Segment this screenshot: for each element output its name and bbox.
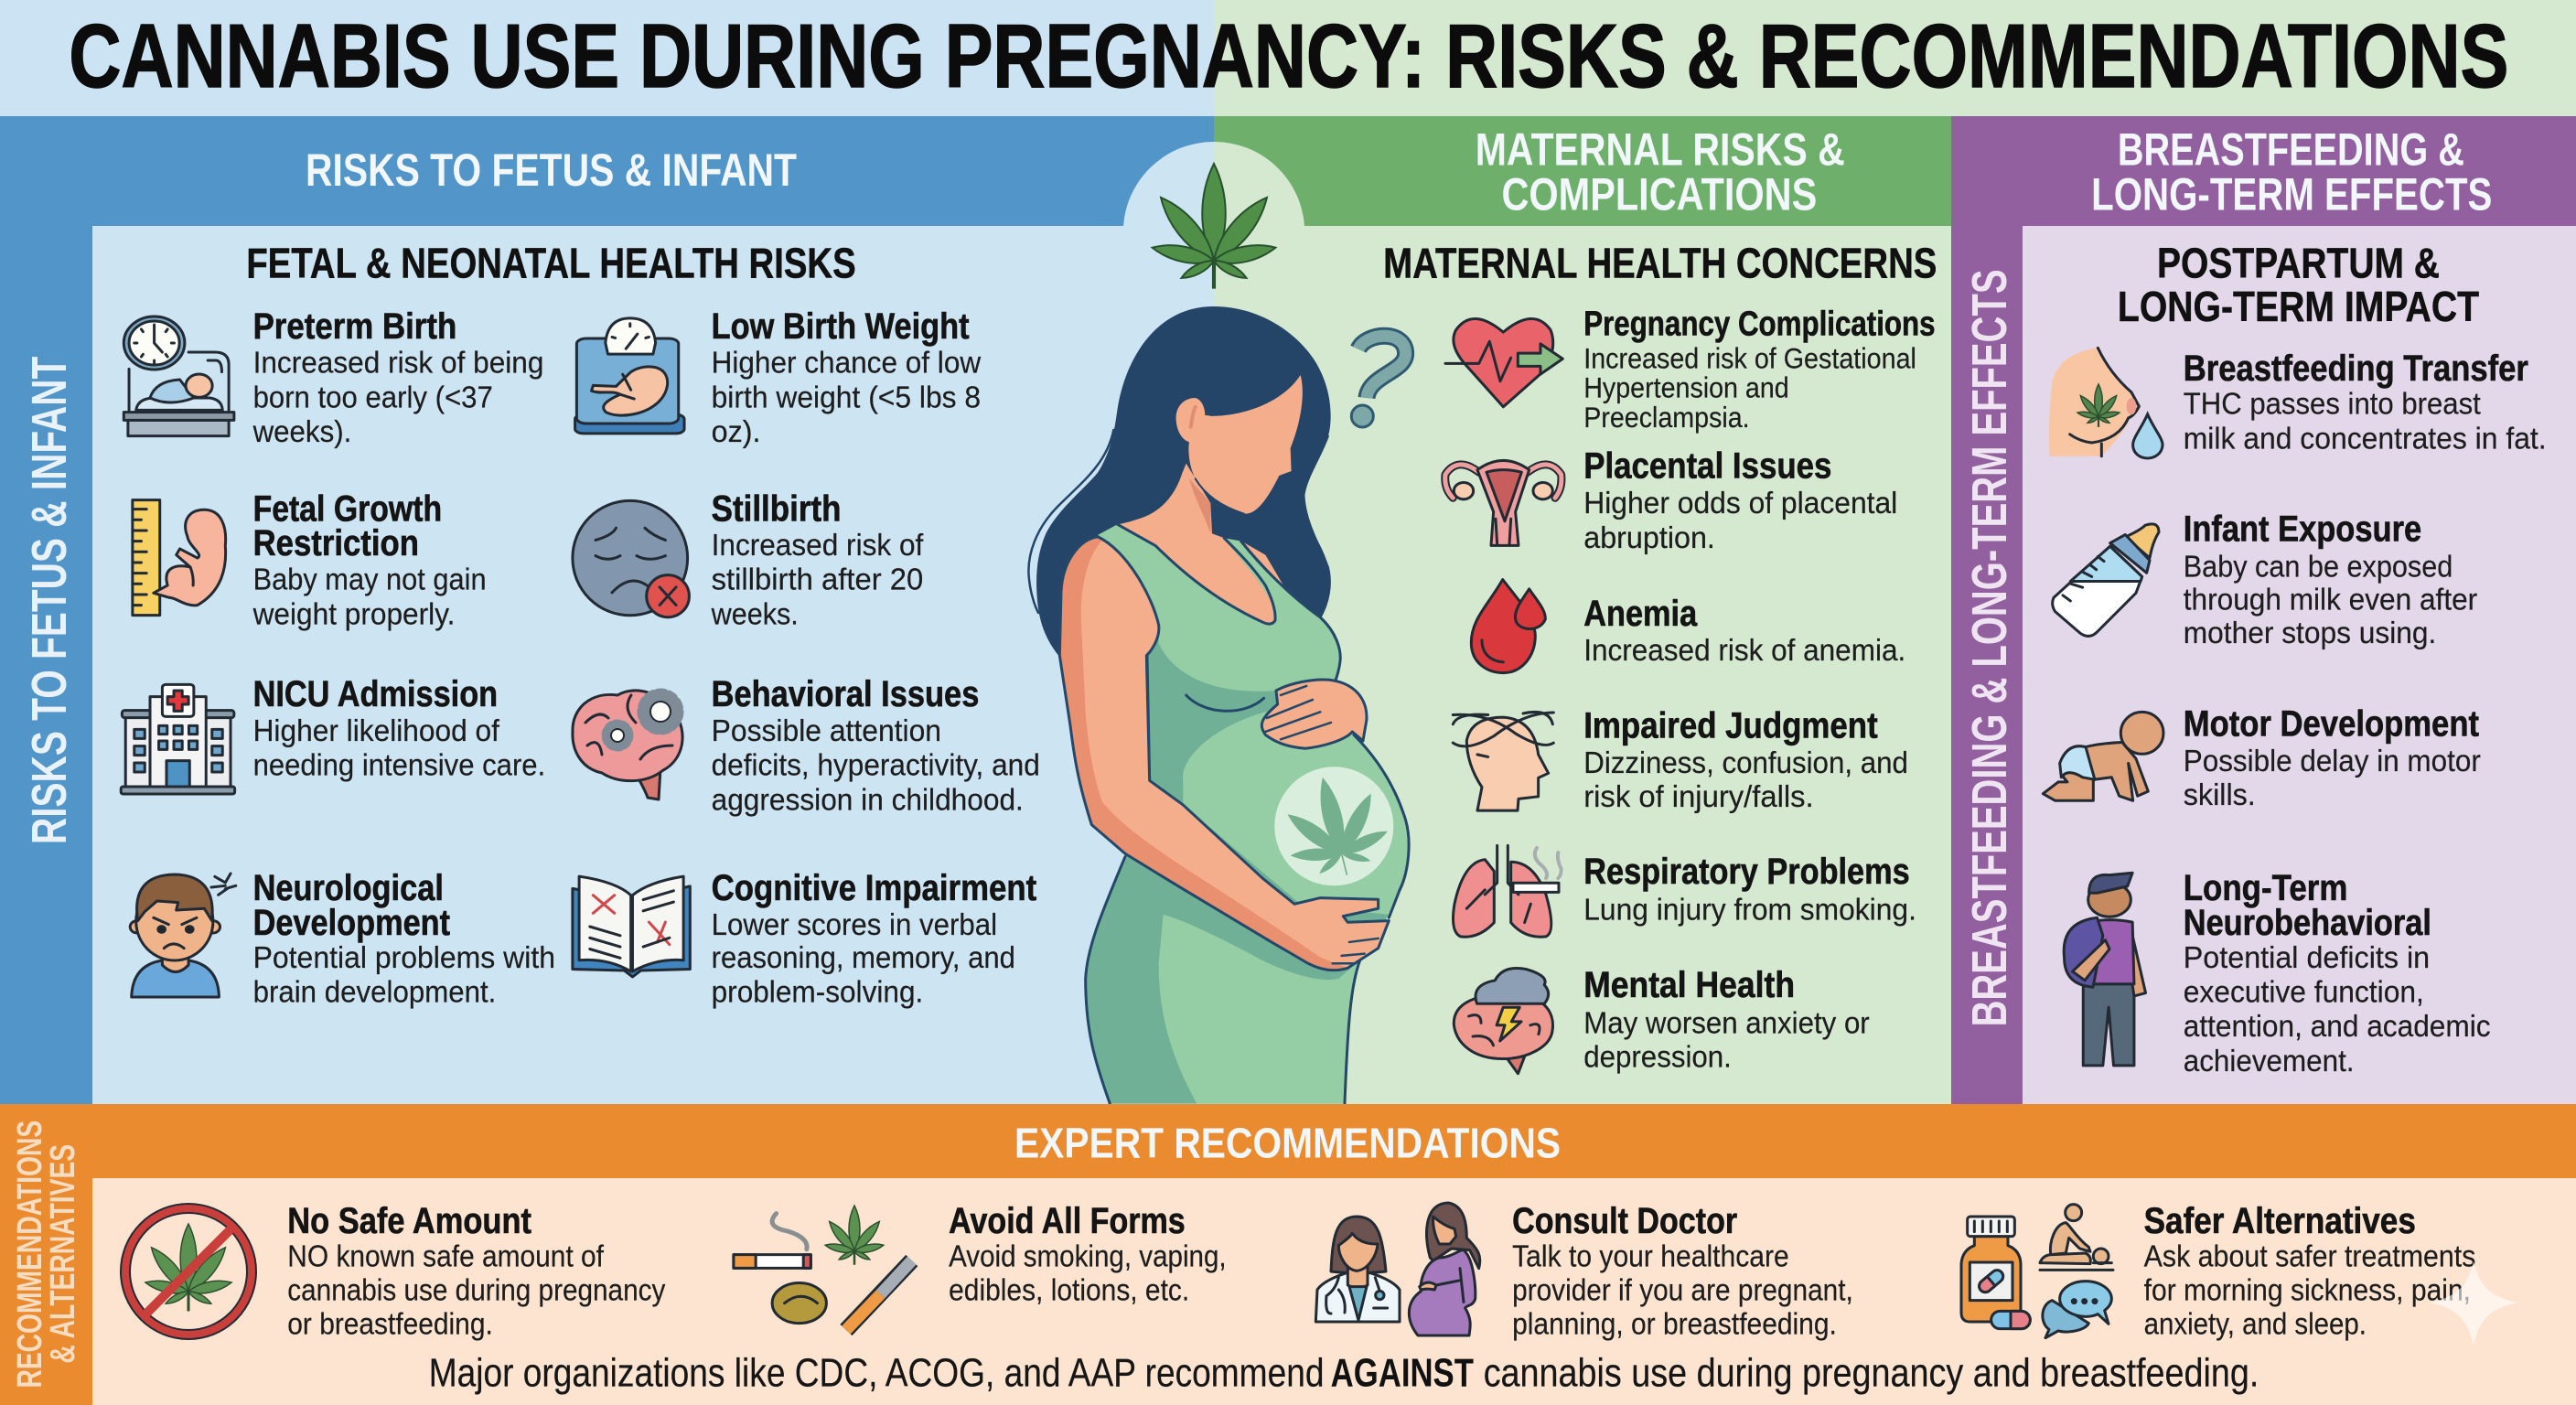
side label: risks to fetus and infant: RISKS TO FETUS & INFANT xyxy=(22,357,77,844)
text: avoid all forms: edibles, lotions, etc. xyxy=(949,1272,1189,1307)
text: neurological development: Development xyxy=(253,903,450,943)
icon: breast with leaf and milk drop xyxy=(2049,348,2163,458)
text: fetal growth restriction: Fetal Growth xyxy=(253,488,442,529)
text: respiratory problems: Respiratory Problems xyxy=(1583,852,1910,892)
text: long-term neurobehavioral: Long-Term xyxy=(2184,868,2347,908)
header: breastfeeding and long-term effects: BREASTFEEDING & xyxy=(2118,123,2464,175)
item: respiratory problems xyxy=(1453,845,1916,937)
text: preterm birth: born too early (<37 xyxy=(253,380,493,414)
text: placental issues xyxy=(1583,446,1897,555)
item: motor development xyxy=(2043,704,2481,812)
icon: brain with gears xyxy=(573,691,682,799)
text: consult doctor: Talk to your healthcare xyxy=(1512,1239,1789,1274)
text: infant exposure: Baby can be exposed xyxy=(2184,549,2453,584)
text: long-term neurobehavioral xyxy=(2184,868,2491,1078)
text: stillbirth: weeks. xyxy=(711,596,799,631)
header: expert recommendations: EXPERT RECOMMENDATIONS xyxy=(1014,1119,1561,1166)
item: placental issues xyxy=(1445,446,1897,555)
text: cognitive impairment: reasoning, memory, and xyxy=(712,940,1015,975)
text: neurological development: Neurological xyxy=(253,868,444,908)
icon: question mark xyxy=(1351,336,1406,427)
text: mental health: Mental Health xyxy=(1583,965,1795,1005)
text: placental issues: Placental Issues xyxy=(1583,446,1831,487)
text: pregnancy complications: Preeclampsia. xyxy=(1583,401,1750,434)
item: stillbirth xyxy=(573,488,924,631)
text: safer alternatives xyxy=(2144,1201,2475,1341)
text: pregnancy complications xyxy=(1583,304,1936,434)
icon: prohibited cannabis xyxy=(121,1204,256,1339)
text: NICU admission: needing intensive care. xyxy=(253,748,545,783)
text: cognitive impairment: problem-solving. xyxy=(712,974,923,1009)
header: maternal risks and complications: MATERNAL RISKS & xyxy=(1476,123,1845,175)
dome with cannabis leaf xyxy=(1123,142,1304,288)
text: avoid all forms: Avoid All Forms xyxy=(949,1201,1186,1241)
text: cognitive impairment xyxy=(712,868,1036,1009)
dress xyxy=(1086,524,1409,1104)
text: preterm birth: Increased risk of being xyxy=(253,346,543,381)
text: breastfeeding transfer: milk and concentrates in fat. xyxy=(2184,421,2547,456)
text: no safe amount: or breastfeeding. xyxy=(287,1306,493,1341)
icon: lungs and cigarette xyxy=(1453,845,1562,937)
text: behavioral issues: Possible attention xyxy=(712,713,941,748)
panel: expert recommendations xyxy=(0,1104,2576,1405)
text: low birth weight: Higher chance of low xyxy=(712,346,982,381)
text: stillbirth xyxy=(711,488,924,631)
footer statement xyxy=(429,1352,2259,1396)
arm xyxy=(1059,537,1389,971)
text: avoid all forms: Avoid smoking, vaping, xyxy=(949,1239,1227,1274)
item: low birth weight xyxy=(575,306,982,449)
text: consult doctor: Consult Doctor xyxy=(1512,1201,1737,1241)
text: infant exposure: Infant Exposure xyxy=(2184,509,2421,550)
text: consult doctor xyxy=(1512,1201,1853,1341)
icon: dizzy head xyxy=(1453,712,1553,810)
text: no safe amount xyxy=(287,1201,665,1341)
text: no safe amount: cannabis use during pregnancy xyxy=(287,1272,665,1307)
text: motor development: Motor Development xyxy=(2184,704,2479,745)
text: pregnancy complications: Hypertension and xyxy=(1583,371,1789,404)
item: mental health xyxy=(1454,965,1870,1074)
text: no safe amount: No Safe Amount xyxy=(287,1201,531,1241)
item: impaired judgment xyxy=(1453,705,1908,814)
illustration: pregnant woman xyxy=(1028,306,1409,1104)
heading: fetal and neonatal health risks: FETAL & NEONATAL HEALTH RISKS xyxy=(246,240,856,287)
text: infant exposure xyxy=(2184,509,2477,650)
chest and neck xyxy=(1118,462,1285,624)
header: breastfeeding and long-term effects xyxy=(2091,123,2492,220)
icon: brain with storm cloud xyxy=(1454,968,1552,1074)
text: cognitive impairment: Lower scores in verbal xyxy=(712,907,997,942)
dress outlines xyxy=(1086,524,1409,1104)
text: low birth weight xyxy=(712,306,982,449)
text: pregnancy complications: Pregnancy Complications xyxy=(1583,304,1936,342)
icon: baby scale xyxy=(575,318,684,434)
text: anemia: Anemia xyxy=(1583,594,1698,634)
item: breastfeeding transfer xyxy=(2049,348,2547,458)
text: mental health xyxy=(1583,965,1870,1074)
text: stillbirth: Increased risk of xyxy=(712,528,924,563)
text: breastfeeding transfer: THC passes into breast xyxy=(2184,387,2481,422)
text: safer alternatives: for morning sickness, pain, xyxy=(2144,1272,2471,1307)
icon: uterus xyxy=(1445,460,1562,545)
hair xyxy=(1028,306,1331,659)
text: impaired judgment: risk of injury/falls. xyxy=(1583,779,1814,814)
footer statement: cannabis use during pregnancy and breastfeeding. xyxy=(1484,1352,2259,1396)
text: infant exposure: mother stops using. xyxy=(2184,616,2436,650)
item: no safe amount xyxy=(121,1201,665,1341)
text: anemia: Increased risk of anemia. xyxy=(1583,633,1905,668)
text: avoid all forms xyxy=(949,1201,1227,1307)
text: behavioral issues: Behavioral Issues xyxy=(712,674,979,714)
icon: ruler and fetus xyxy=(133,500,226,616)
text: NICU admission xyxy=(253,674,545,783)
item: NICU admission xyxy=(121,674,545,794)
icon: baby bottle xyxy=(2053,524,2159,636)
text: motor development: skills. xyxy=(2184,778,2256,812)
icon: incubator and clock xyxy=(123,316,234,436)
text: impaired judgment: Dizziness, confusion, and xyxy=(1583,745,1908,780)
text: NICU admission: Higher likelihood of xyxy=(253,713,500,748)
side label: recommendations and alternatives xyxy=(10,1121,81,1389)
icon: child with backpack xyxy=(2064,873,2146,1066)
side label: recommendations and alternatives: & ALTERNATIVES xyxy=(43,1144,81,1364)
text: respiratory problems: Lung injury from smoking. xyxy=(1583,893,1916,928)
icon: crawling baby xyxy=(2043,712,2163,800)
text: neurological development: brain development. xyxy=(253,974,496,1009)
text: consult doctor: provider if you are pregnant, xyxy=(1512,1272,1853,1307)
text: low birth weight: Low Birth Weight xyxy=(712,306,970,347)
text: mental health: depression. xyxy=(1583,1039,1732,1074)
footer statement: Major organizations like CDC, ACOG, and AAP recommend xyxy=(429,1352,1324,1396)
text: low birth weight: birth weight (<5 lbs 8 xyxy=(712,380,981,414)
header: maternal risks and complications: COMPLICATIONS xyxy=(1501,167,1817,220)
text: preterm birth xyxy=(252,306,543,449)
side label: breastfeeding and long-term effects: BREASTFEEDING & LONG-TERM EFFECTS xyxy=(1962,270,2017,1026)
text: long-term neurobehavioral: Neurobehavioral xyxy=(2184,903,2431,943)
text: behavioral issues: aggression in childhood. xyxy=(712,782,1024,817)
text: placental issues: abruption. xyxy=(1583,520,1715,555)
heading: postpartum and long-term impact: POSTPARTUM & xyxy=(2157,240,2440,287)
icon: hospital xyxy=(121,684,235,794)
icon: blood drops xyxy=(1471,580,1545,673)
text: pregnancy complications: Increased risk of Gestational xyxy=(1583,341,1916,374)
icon: open book xyxy=(573,876,690,977)
text: infant exposure: through milk even after xyxy=(2184,582,2477,617)
icon: heart with pulse xyxy=(1445,318,1562,407)
face xyxy=(1176,375,1303,514)
text: preterm birth: weeks). xyxy=(252,414,351,449)
text: stillbirth: stillbirth after 20 xyxy=(712,563,923,597)
text: behavioral issues: deficits, hyperactivity, and xyxy=(712,748,1040,783)
text: NICU admission: NICU Admission xyxy=(253,674,498,714)
icon: medicine, massage and counselling xyxy=(1961,1205,2113,1338)
item: behavioral issues xyxy=(573,674,1040,817)
text: mental health: May worsen anxiety or xyxy=(1583,1006,1870,1041)
header: risks to fetus and infant: RISKS TO FETUS & INFANT xyxy=(306,144,797,196)
text: fetal growth restriction: Baby may not gain xyxy=(253,563,487,597)
footer statement: AGAINST xyxy=(1331,1352,1474,1396)
belly emblem xyxy=(1272,765,1397,887)
panel: risks to fetus and infant xyxy=(0,116,1214,1104)
text: breastfeeding transfer xyxy=(2184,349,2547,456)
panel: maternal risks and complications xyxy=(1214,116,1951,1104)
text: fetal growth restriction: Restriction xyxy=(253,523,419,563)
text: placental issues: Higher odds of placental xyxy=(1583,486,1897,520)
icon: sad face xyxy=(573,500,689,617)
heading: maternal health concerns: MATERNAL HEALTH CONCERNS xyxy=(1383,240,1937,287)
side label: recommendations and alternatives: RECOMMENDATIONS xyxy=(10,1121,48,1389)
text: long-term neurobehavioral: attention, and academic xyxy=(2184,1009,2491,1044)
panel: breastfeeding and long-term effects xyxy=(1951,116,2576,1104)
text: safer alternatives: anxiety, and sleep. xyxy=(2144,1306,2367,1341)
text: cognitive impairment: Cognitive Impairment xyxy=(712,868,1036,908)
item: anemia xyxy=(1471,580,1905,673)
heading: postpartum and long-term impact: LONG-TERM IMPACT xyxy=(2118,283,2479,330)
text: neurological development: Potential problems with xyxy=(253,940,555,975)
sparkle mark xyxy=(2430,1261,2517,1346)
text: preterm birth: Preterm Birth xyxy=(253,306,456,347)
upper hand xyxy=(1261,680,1367,748)
header: maternal risks and complications xyxy=(1476,123,1845,220)
text: fetal growth restriction xyxy=(252,488,487,631)
text: neurological development xyxy=(253,868,555,1009)
text: consult doctor: planning, or breastfeeding. xyxy=(1512,1306,1837,1341)
text: anemia xyxy=(1583,594,1905,668)
icon: cannabis product forms xyxy=(734,1206,912,1330)
item: cognitive impairment xyxy=(573,868,1036,1009)
text: long-term neurobehavioral: Potential deficits in xyxy=(2184,940,2430,975)
text: safer alternatives: Safer Alternatives xyxy=(2144,1201,2416,1241)
icon: doctor and pregnant patient xyxy=(1315,1203,1480,1335)
item: fetal growth restriction xyxy=(133,488,487,631)
item: safer alternatives xyxy=(1961,1201,2475,1341)
item: infant exposure xyxy=(2053,509,2477,650)
heading: postpartum and long-term impact xyxy=(2118,240,2479,330)
text: motor development: Possible delay in motor xyxy=(2184,744,2481,778)
text: motor development xyxy=(2184,704,2481,812)
text: long-term neurobehavioral: executive function, xyxy=(2184,974,2424,1009)
text: breastfeeding transfer: Breastfeeding Transfer xyxy=(2184,349,2528,389)
text: long-term neurobehavioral: achievement. xyxy=(2184,1044,2355,1078)
text: impaired judgment xyxy=(1583,705,1908,814)
item: consult doctor xyxy=(1315,1201,1853,1341)
text: behavioral issues xyxy=(712,674,1040,817)
item: pregnancy complications xyxy=(1445,304,1936,434)
item: long-term neurobehavioral xyxy=(2064,868,2491,1078)
text: no safe amount: NO known safe amount of xyxy=(287,1239,605,1274)
icon: angry child xyxy=(130,874,236,997)
text: low birth weight: oz). xyxy=(712,414,761,449)
text: fetal growth restriction: weight properly. xyxy=(252,596,455,631)
item: neurological development xyxy=(130,868,555,1009)
text: respiratory problems xyxy=(1583,852,1916,928)
text: safer alternatives: Ask about safer treatments xyxy=(2144,1239,2475,1274)
item: avoid all forms xyxy=(734,1201,1227,1330)
text: stillbirth: Stillbirth xyxy=(712,488,842,529)
item: preterm birth xyxy=(123,306,543,449)
icon: leaf on breast xyxy=(2077,384,2120,426)
text: impaired judgment: Impaired Judgment xyxy=(1583,705,1878,745)
